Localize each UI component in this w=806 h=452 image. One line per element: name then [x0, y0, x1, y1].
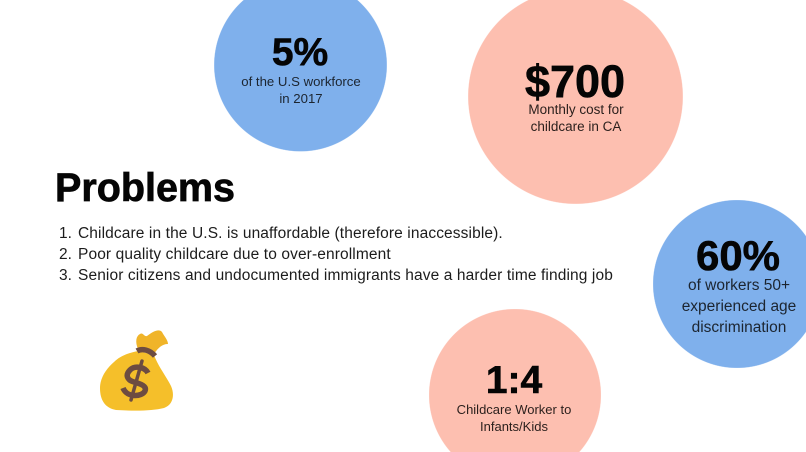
stat value: 5%: 5% [272, 31, 328, 74]
problem 3: 3. [59, 266, 72, 284]
stat label: ratio [457, 402, 571, 434]
problem 1: Childcare in the U.S. is unaffordable (therefore inaccessible). [78, 224, 503, 242]
stat label: monthly cost [528, 102, 624, 134]
stat label: workforce: in 2017 [279, 91, 323, 106]
stat circle: 5% of workforce [214, 0, 387, 152]
heading: Problems: Problems [55, 166, 235, 210]
stat value: 60%: 60% [696, 232, 780, 279]
problem 1: 1. [59, 224, 72, 242]
stat circle: 60% age discrimination [653, 200, 806, 368]
stat label: workforce [241, 74, 361, 106]
stat label: ratio: Childcare Worker to [457, 402, 571, 416]
problem 2: Poor quality childcare due to over-enrollment [78, 246, 391, 262]
problem 2: 2. [59, 246, 72, 262]
problem 3: Senior citizens and undocumented immigrants have a harder time finding job [78, 266, 613, 284]
stat label: age discrimination: experienced age [682, 298, 796, 314]
stat circle: 1:4 ratio [429, 309, 601, 452]
stat circle: $700 monthly cost [468, 0, 683, 204]
stat label: monthly cost: childcare in CA [531, 119, 621, 134]
stat label: age discrimination [682, 276, 796, 336]
numbered list of problems [59, 224, 613, 284]
stat label: ratio: Infants/Kids [480, 418, 548, 434]
stat label: age discrimination: discrimination [692, 318, 786, 336]
stat label: monthly cost: Monthly cost for [528, 102, 624, 116]
stat value: 1:4: 1:4 [486, 359, 542, 402]
icon: money bag [100, 330, 173, 411]
stat label: age discrimination: of workers 50+ [688, 276, 790, 294]
stat label: workforce: of the U.S workforce [241, 74, 361, 88]
stat value: $700: $700 [525, 56, 625, 107]
